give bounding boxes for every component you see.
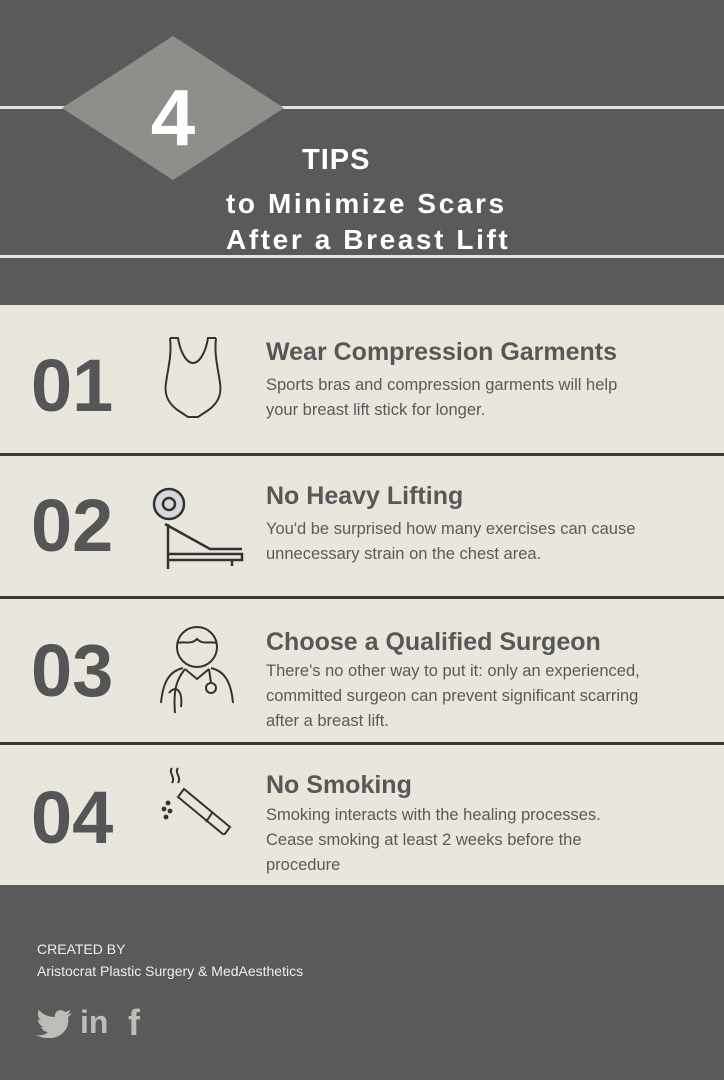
diamond badge bbox=[62, 36, 284, 180]
header: After a Breast Lift bbox=[226, 224, 510, 255]
tip 04 bbox=[31, 767, 601, 874]
footer credits bbox=[37, 941, 303, 979]
tip 02 bbox=[31, 482, 635, 569]
tip 01 bbox=[31, 337, 617, 427]
social icons: in bbox=[80, 1004, 108, 1040]
tip 03: 03 bbox=[31, 629, 113, 712]
tip 03: There's no other way to put it: only an experienced, committed surgeon can prevent significant scarring after a breast lift. bbox=[266, 662, 640, 730]
icon: bench press bbox=[152, 488, 244, 569]
tip 01: Sports bras and compression garments will help your breast lift stick for longer. bbox=[266, 376, 617, 419]
tip 02: You'd be surprised how many exercises can cause unnecessary strain on the chest area. bbox=[266, 520, 635, 563]
icon: bodysuit bbox=[164, 337, 222, 418]
tip 03 bbox=[31, 626, 640, 730]
diamond badge: 4 bbox=[151, 73, 196, 162]
tip 02: 02 bbox=[31, 484, 113, 567]
footer credits: Aristocrat Plastic Surgery & MedAesthetics bbox=[37, 963, 303, 979]
icon: surgeon bbox=[160, 626, 234, 714]
tip 04: Smoking interacts with the healing processes. Cease smoking at least 2 weeks before the procedure bbox=[266, 806, 601, 874]
social icons: f bbox=[128, 1002, 140, 1043]
icon: cigarette bbox=[162, 767, 232, 835]
header bbox=[0, 0, 724, 305]
tip 01: Wear Compression Garments bbox=[266, 338, 617, 366]
tips panel bbox=[0, 305, 724, 885]
social icons bbox=[36, 1002, 140, 1043]
tip 04: No Smoking bbox=[266, 771, 412, 799]
tip 03: Choose a Qualified Surgeon bbox=[266, 628, 601, 656]
tip 01: 01 bbox=[31, 344, 113, 427]
footer credits: CREATED BY bbox=[37, 941, 125, 957]
header: to Minimize Scars bbox=[226, 188, 507, 219]
title bbox=[226, 144, 510, 255]
tip 04: 04 bbox=[31, 776, 113, 859]
tip 02: No Heavy Lifting bbox=[266, 482, 463, 510]
header: TIPS bbox=[302, 144, 370, 176]
